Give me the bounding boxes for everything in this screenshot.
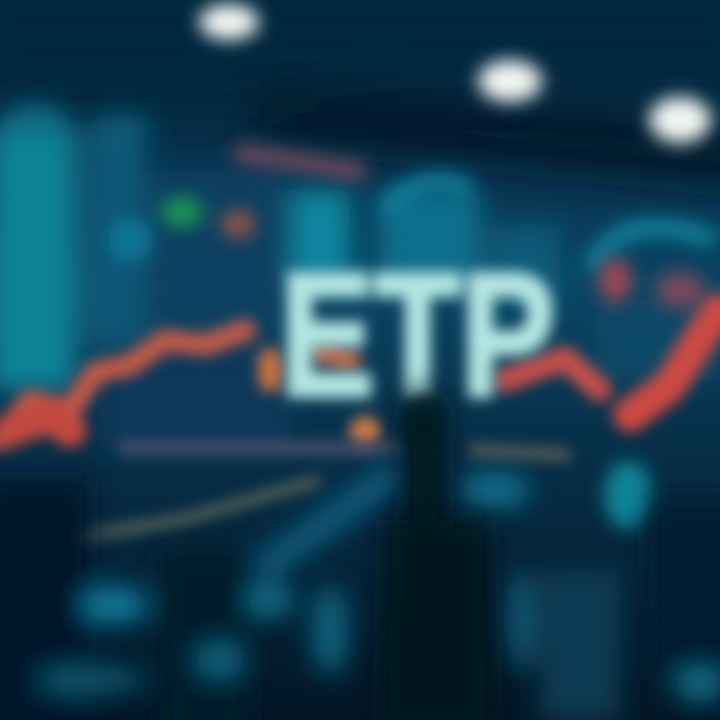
arc screens [385, 182, 715, 270]
ETP glow text: ETP [280, 238, 555, 433]
chart markers [108, 152, 705, 529]
screen panels [0, 104, 720, 450]
red trend line right [320, 310, 718, 448]
lower chart lines [70, 448, 570, 538]
red trend line left [0, 330, 270, 440]
lower desk area [0, 470, 720, 720]
ceiling lights [199, 4, 711, 143]
dark ceiling band [0, 0, 720, 185]
silhouette figure [380, 389, 495, 720]
